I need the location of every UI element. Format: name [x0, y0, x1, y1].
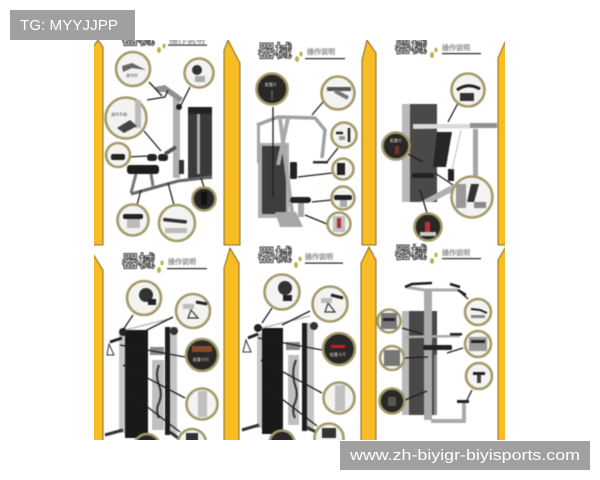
- panel: pec fly machine: [256, 42, 356, 236]
- heading: 器械: [258, 42, 292, 61]
- heading: [258, 246, 343, 268]
- tag: telegram handle: TG: MYYJJPP: [20, 17, 118, 34]
- callout circles: 配重卡尺: [193, 356, 209, 362]
- callout lines: [128, 82, 204, 205]
- callout circles: [106, 52, 216, 241]
- heading: [122, 252, 207, 273]
- machine: [402, 283, 469, 421]
- heading: 操作说明: [307, 47, 335, 56]
- heading: 操作说明: [442, 248, 470, 257]
- callout circles: 配重卡尺: [330, 351, 346, 357]
- heading: 操作说明: [305, 252, 333, 261]
- heading: 操作说明: [168, 257, 196, 266]
- heading: [395, 244, 481, 264]
- machine: [402, 104, 497, 202]
- machine: [242, 316, 318, 434]
- callout lines: [258, 308, 322, 426]
- heading: 器械: [395, 244, 427, 262]
- callout circles: [378, 299, 492, 414]
- tag: website address: [340, 441, 590, 470]
- callout circles: 配重片: [390, 137, 402, 143]
- panel: shoulder press machine: [382, 38, 497, 240]
- machine: [257, 117, 328, 227]
- callout circles: [264, 274, 355, 456]
- equipment photo collage: [93, 29, 507, 460]
- heading: [258, 42, 345, 62]
- callout lines: [120, 315, 185, 437]
- heading: 器械: [395, 38, 427, 56]
- heading: 操作说明: [442, 43, 470, 52]
- callout lines: [408, 103, 458, 213]
- callout lines: [402, 290, 472, 400]
- panel: functional trainer B: [242, 246, 355, 456]
- callout circles: [382, 74, 492, 240]
- machine: [105, 318, 178, 438]
- heading: 器械: [122, 29, 156, 48]
- panel: chin dip machine: [378, 244, 492, 421]
- callout lines: [273, 102, 338, 224]
- callout circles: 调节杆: [126, 72, 138, 78]
- heading: 器械: [122, 252, 156, 271]
- heading: [395, 38, 481, 58]
- callout circles: 调节手柄: [111, 111, 127, 117]
- callout circles: 配重片: [265, 81, 277, 87]
- callout circles: [256, 74, 356, 236]
- tag: website address: www.zh-biyigr-biyisports.com: [349, 447, 580, 464]
- heading: 操作说明: [169, 34, 205, 45]
- callout circles: [127, 281, 218, 460]
- heading: [121, 40, 208, 54]
- machine: [127, 85, 212, 194]
- panel: lat pulldown machine: [106, 29, 216, 241]
- panel: functional trainer A: [105, 252, 218, 460]
- tag: telegram handle: [10, 10, 135, 40]
- heading: 器械: [258, 246, 292, 265]
- yellow side strips: [93, 40, 507, 441]
